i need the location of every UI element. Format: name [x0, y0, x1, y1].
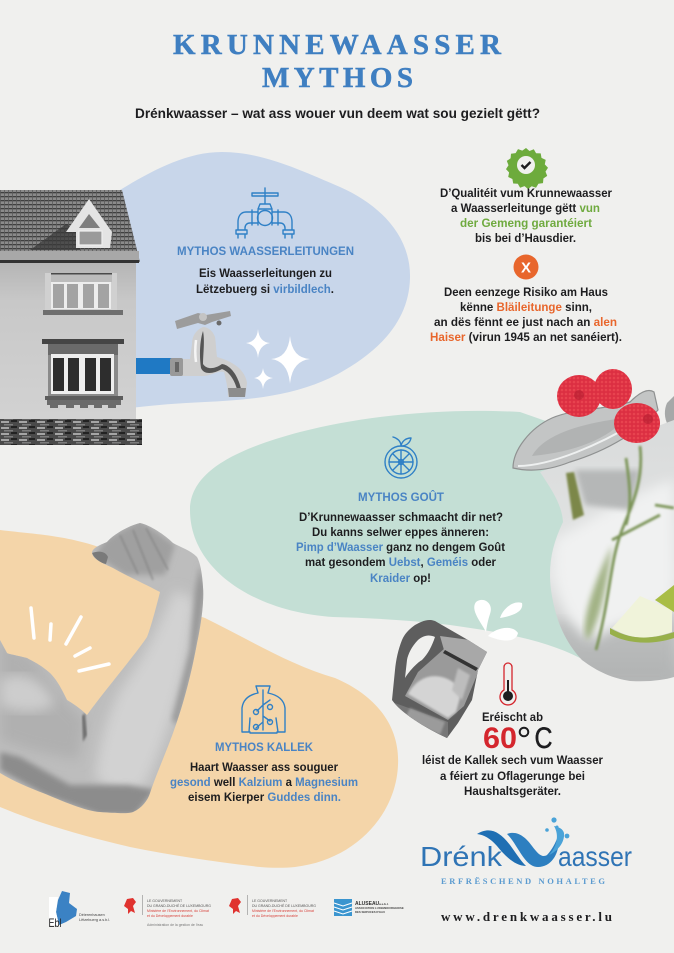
arm photo: [0, 515, 210, 820]
sparkles: [246, 329, 310, 389]
blob: green: [190, 411, 600, 662]
icon: quality badge: [506, 148, 548, 189]
blue pipe: [136, 358, 172, 374]
title: KRUNNEWAASSER: [173, 29, 502, 61]
website url: www.drenkwaasser.lu: [441, 909, 612, 924]
text: gout: Pimp d’Waasser ganz no dengem Goût: [296, 540, 505, 554]
logo: government 1: et du Développement durable: [147, 914, 193, 918]
text: risk: an dës fënnt ee just nach an alen: [434, 315, 617, 329]
text: risk: Haiser (virun 1945 an net sanéiert).: [430, 330, 622, 344]
icon: x risk: [514, 254, 538, 280]
text: kettle lead in: Eréischt ab: [482, 710, 543, 724]
icon: thermometer: [500, 663, 516, 705]
text: kallek: Haart Waasser ass souguer: [190, 760, 338, 774]
text: risk: kënne Bläileitunge sinn,: [460, 300, 592, 314]
logo: aluseau: ALUSEAUa.s.b.l.: [355, 901, 389, 907]
heading: mythos waasserleitungen: MYTHOS WAASSERLEITUNGEN: [177, 246, 354, 258]
logo: aluseau: DES SERVICES D’EAU: [355, 910, 385, 914]
logo: drenk waasser: aasser: [558, 841, 632, 872]
raspberries: [557, 369, 660, 443]
text: gout: D’Krunnewaasser schmaacht dir net?: [299, 510, 503, 524]
temperature 60 C: [483, 722, 552, 755]
logo: aluseau: ASSOCIATION LUXEMBOURGEOISE: [355, 906, 404, 910]
temperature 60 C: C: [534, 722, 552, 755]
logo: government 1: DU GRAND-DUCHÉ DE LUXEMBOURG: [147, 903, 211, 908]
logo: government 2: [229, 895, 316, 918]
heading: mythos kallek: MYTHOS KALLEK: [215, 742, 314, 754]
logo: ebl: Lëtzebuerg a.s.b.l.: [79, 918, 110, 922]
logo: drenk waasser: [420, 817, 632, 886]
logo: ebl: Ebl: [48, 916, 62, 930]
temperature 60 C: 60: [483, 722, 517, 755]
logo: government 2: et du Développement durable: [252, 914, 298, 918]
title: MYTHOS: [262, 62, 413, 94]
text: kallek: [170, 760, 358, 804]
logo: government 1: Ministère de l’Environnement, du Climat: [147, 909, 209, 913]
text: kallek deposit: [422, 753, 603, 798]
icon: citrus: [385, 437, 417, 478]
subtitle: Drénkwaasser – wat ass wouer vun deem wat sou gezielt gëtt?: [135, 105, 540, 121]
title: [173, 29, 502, 94]
heading: mythos gout: MYTHOS GOÛT: [358, 491, 444, 504]
water drops: [474, 600, 522, 641]
text: risk: Deen eenzege Risiko am Haus: [444, 285, 608, 299]
text: kallek deposit: Haushaltsgeräter.: [464, 784, 561, 798]
text: quality: D’Qualitéit vum Krunnewaasser: [440, 186, 612, 200]
muscle flex lines: [31, 608, 109, 671]
logo: government 1: LE GOUVERNEMENT: [147, 899, 183, 903]
logo: aluseau: [334, 899, 404, 916]
text: kallek: gesond well Kalzium a Magnesium: [170, 775, 358, 789]
logo: government 1: [124, 895, 211, 927]
logo: drenk waasser: Drénk: [420, 841, 503, 872]
logo: government 2: LE GOUVERNEMENT: [252, 899, 288, 903]
logo: government 1: Administration de la gestion de l’eau: [147, 923, 203, 927]
text: quality: [440, 186, 612, 245]
icon: body: [242, 686, 285, 733]
icon: x risk: X: [521, 260, 531, 276]
text: quality: der Gemeng garantéiert: [460, 216, 592, 230]
blob: orange: [0, 530, 398, 868]
logo: ebl: [48, 891, 110, 930]
text: kallek: eisem Kierper Guddes dinn.: [188, 790, 341, 804]
text: quality: a Waasserleitunge gëtt vun: [451, 201, 600, 215]
logo: government 2: DU GRAND-DUCHÉ DE LUXEMBOURG: [252, 903, 316, 908]
logo: government 2: Ministère de l’Environnement, du Climat: [252, 909, 314, 913]
text: gout: [296, 510, 505, 585]
blob: blue: [120, 152, 410, 408]
text: kallek deposit: a féiert zu Oflagerunge bei: [440, 769, 585, 783]
text: risk: [430, 285, 622, 344]
text: waasserleitungen: [196, 266, 334, 296]
icon: pipe valve: [236, 188, 294, 238]
logo: drenk waasser: ERFRËSCHEND NOHALTEG: [441, 876, 605, 886]
logo: ebl: Déierenhausen: [79, 913, 105, 917]
text: waasserleitungen: Lëtzebuerg si virbildlech.: [196, 282, 334, 296]
text: gout: Du kanns selwer eppes änneren:: [312, 525, 489, 539]
text: gout: Kraider op!: [370, 571, 431, 585]
house photo: [0, 190, 142, 445]
faucet photo: [170, 311, 247, 397]
text: quality: bis bei d’Hausdier.: [475, 231, 576, 245]
text: waasserleitungen: Eis Waasserleitungen zu: [199, 266, 332, 280]
text: kallek deposit: léist de Kallek sech vum Waasser: [422, 753, 603, 767]
jug photo: [513, 390, 674, 681]
kettle photo: [392, 620, 487, 738]
text: gout: mat gesondem Uebst, Geméis oder: [305, 555, 496, 569]
